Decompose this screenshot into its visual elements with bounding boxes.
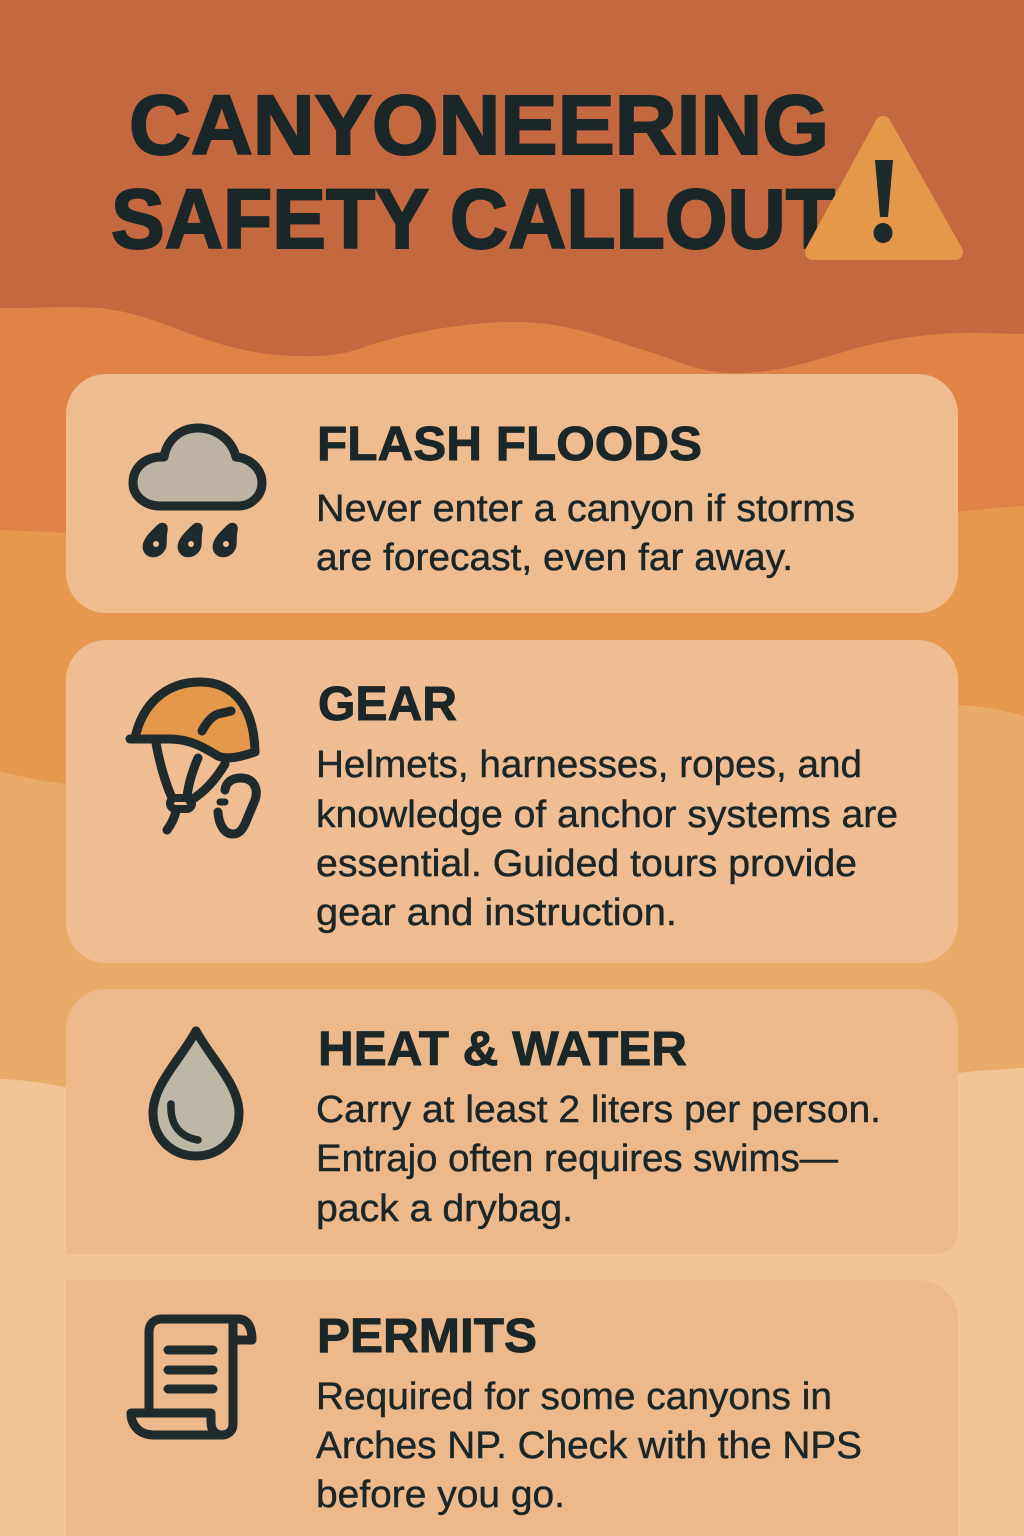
title <box>111 78 835 266</box>
icon: helmet and carabiner <box>130 682 256 834</box>
text: permits body: Required for some canyons in <box>316 1376 832 1418</box>
text: heat and water body: Entrajo often requires swims— <box>316 1138 838 1180</box>
panel: gear <box>66 640 958 963</box>
heading: heat and water: HEAT & WATER <box>318 1022 687 1076</box>
text: gear body: Helmets, harnesses, ropes, and <box>316 744 862 786</box>
text: gear body <box>316 744 898 934</box>
heading: flash floods: FLASH FLOODS <box>317 417 702 471</box>
text: permits body: before you go. <box>316 1474 565 1516</box>
icon: permit scroll <box>131 1319 252 1435</box>
panel: heat and water <box>66 989 958 1254</box>
heading: permits: PERMITS <box>317 1309 537 1363</box>
text: permits body: Arches NP. Check with the NPS <box>316 1425 862 1467</box>
text: flash floods body: Never enter a canyon if storms <box>316 488 855 530</box>
heading: gear: GEAR <box>318 677 457 731</box>
icon: rain cloud <box>133 428 262 556</box>
text: heat and water body: pack a drybag. <box>316 1188 573 1230</box>
text: heat and water body: Carry at least 2 liters per person. <box>316 1089 881 1131</box>
text: gear body: gear and instruction. <box>316 892 677 934</box>
text: permits body <box>316 1376 862 1516</box>
panel: flash floods <box>66 374 958 613</box>
title: SAFETY CALLOUT <box>111 172 835 266</box>
text: gear body: essential. Guided tours provide <box>316 843 857 885</box>
icon: warning triangle <box>813 124 955 252</box>
title: CANYONEERING <box>129 78 829 172</box>
panel: permits <box>66 1280 958 1536</box>
icon: water drop <box>153 1031 239 1156</box>
text: flash floods body <box>316 488 855 579</box>
text: heat and water body <box>316 1089 881 1230</box>
text: gear body: knowledge of anchor systems are <box>316 794 898 836</box>
text: flash floods body: are forecast, even far away. <box>316 537 793 579</box>
